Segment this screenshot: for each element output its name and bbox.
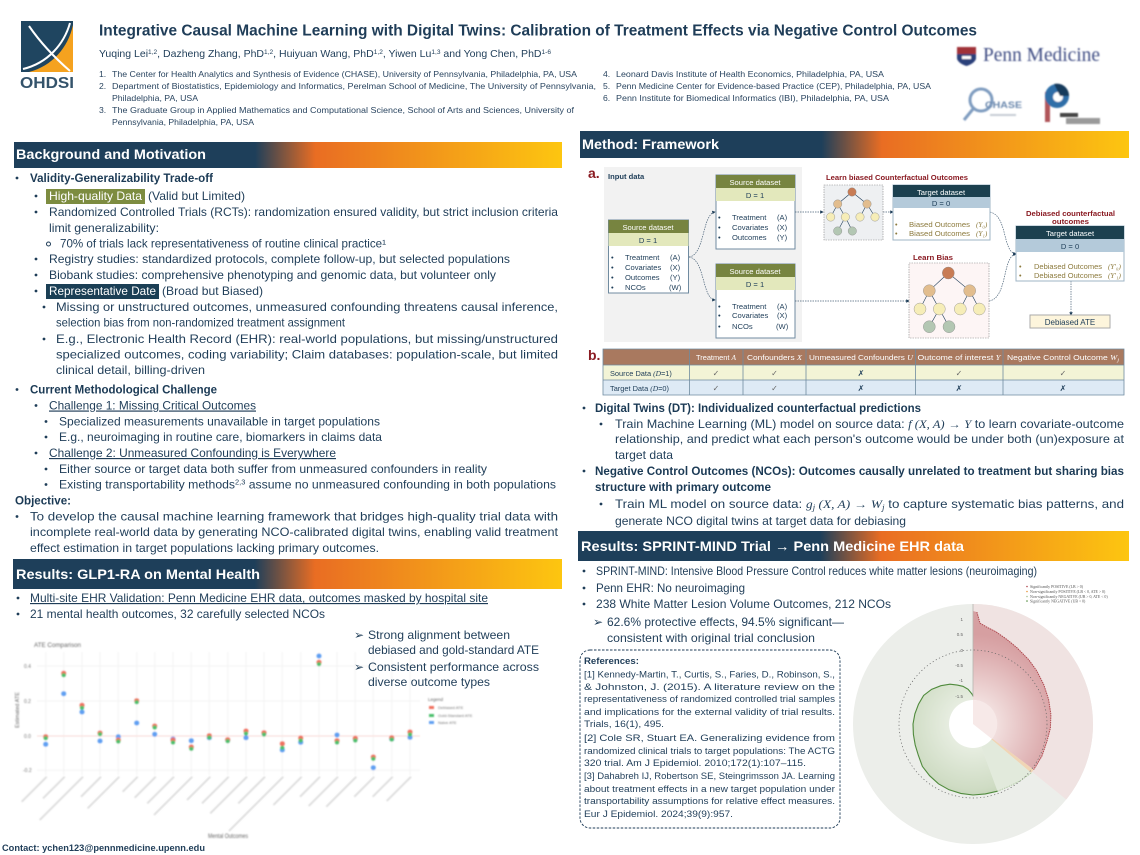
text block: current methodological challenge: Challenge 2: Unmeasured Confounding is Everywhere: [49, 447, 336, 460]
arrows: flow connectors: [689, 212, 1071, 315]
text block: objective: effect estimation in target populations lacking primary outcomes.: [30, 542, 379, 555]
box: source dataset NCOs: Covariates: [732, 311, 768, 320]
legend: [428, 697, 473, 725]
box: source dataset full: •: [611, 283, 614, 292]
box: source dataset outcomes: (Y): [777, 233, 788, 242]
text block: current methodological challenge: Specialized measurements unavailable in target populations: [59, 416, 380, 428]
references: 320 trial. Am J Epidemiol. 2010;172(1):107–115.: [584, 758, 806, 769]
text block: validity-generalizability trade-off: High-quality Data: [49, 190, 143, 203]
references: [2] Cole SR, Stuart EA. Generalizing evidence from: [584, 733, 835, 744]
references: randomized clinical trials to target populations: The ACTG: [584, 746, 835, 757]
callout: GLP1 findings: [354, 628, 539, 689]
box: target dataset debiased: (Y′₀): [1108, 263, 1121, 271]
box: target dataset debiased: [1016, 226, 1124, 281]
heading: method framework: Method: Framework: [582, 136, 719, 152]
table b: data availability: [588, 347, 1124, 395]
table b: data availability: Negative Control Outcome W: [1007, 353, 1116, 362]
logo: CHASE: CHASE: [985, 100, 1022, 110]
authors: , Huiyuan Wang, PhD: [273, 49, 374, 60]
text block: validity-generalizability trade-off: selection bias from non-randomized treatment assignment: [56, 316, 346, 330]
logo: OHDSI: [20, 21, 74, 92]
affiliations left: Pennsylvania, Philadelphia, PA, USA: [112, 117, 254, 127]
text block: negative control outcomes: j: [811, 503, 816, 512]
authors: 1,2: [264, 49, 274, 56]
box: source dataset full: (W): [669, 283, 682, 292]
logo: Penn Medicine: Penn Medicine: [983, 44, 1100, 66]
box: source dataset outcomes: [716, 175, 795, 249]
authors: , Yiwen Lu: [383, 49, 432, 60]
box: source dataset NCOs: •: [718, 302, 721, 311]
authors: , Dazheng Zhang, PhD: [157, 49, 264, 60]
heading: GLP1-RA results: Results: GLP1-RA on Mental Health: [16, 566, 260, 582]
references: [3] Dahabreh IJ, Robertson SE, Steingrimsson JA. Learning: [584, 771, 835, 782]
text block: current methodological challenge: Existing transportability methods: [59, 478, 226, 492]
box: source dataset NCOs: [716, 264, 795, 338]
authors: 1,2: [148, 49, 158, 56]
heading: debiased counterfactual outcomes: outcomes: [1052, 217, 1089, 226]
text block: objective: incomplete real-world data by generating NCO-calibrated digital twins, enabling valid treatment: [30, 526, 559, 539]
heading: debiased counterfactual outcomes: Debiased counterfactual: [1026, 209, 1115, 218]
references: Trials, 16(1), 495.: [584, 719, 664, 730]
text block: negative control outcomes: to capture systematic bias patterns, and: [885, 498, 1124, 511]
text block: current methodological challenge: [16, 384, 556, 492]
text block: negative control outcomes: (X, A): [815, 498, 850, 511]
text block: digital twins: target data: [615, 449, 674, 462]
text block: validity-generalizability trade-off: 70% of trials lack representativeness of routine clinical practice¹: [60, 238, 386, 250]
table b: data availability: Confounders X: [747, 353, 803, 362]
table b: data availability: Unmeasured Confounders U: [809, 353, 914, 362]
box: source dataset NCOs: D = 1: [746, 280, 764, 289]
box: source dataset NCOs: (W): [776, 322, 789, 331]
text block: validity-generalizability trade-off: Registry studies: standardized protocols, complete follow-up, but selected populations: [49, 253, 510, 266]
legend: Non-significantly POSITIVE (LB < 0, ATE > 0): [1030, 590, 1106, 595]
diagram a: framework flow: a.: [588, 165, 600, 181]
affiliations left: 3.: [99, 105, 106, 115]
references: [580, 650, 840, 828]
affiliations left: Department of Biostatistics, Epidemiology and Informatics, Perelman School of Medicine, The University of Pennsylvania,: [112, 81, 596, 91]
heading: GLP1-RA results: [13, 559, 562, 589]
legend: Significantly POSITIVE (LB > 0): [1030, 585, 1084, 589]
table b: data availability: Source Data (D=1): [610, 369, 672, 378]
box: target dataset debiased: •: [1019, 271, 1022, 280]
polar chart: white matter lesion outcomes: 0: [960, 648, 963, 653]
text block: validity-generalizability trade-off: clinical detail, billing-driven: [56, 364, 205, 377]
heading: background and motivation: [14, 142, 562, 168]
title: Integrative Causal Machine Learning with Digital Twins: Calibration of Treatment Effects via Negative Control Outcomes: [99, 22, 977, 40]
text block: validity-generalizability trade-off: specialized outcomes, coding variability; Claim databases: population-scale, but limited: [56, 348, 558, 362]
callout: GLP1 findings: ➢: [354, 628, 364, 642]
heading: SPRINT-MIND results: Results: SPRINT-MIND Trial → Penn Medicine EHR data: [581, 538, 964, 554]
text block: digital twins: relationship, and predict what each person's outcome would be under both (un)exposure at: [615, 433, 1125, 446]
table b: data availability: ✓: [771, 369, 778, 378]
box: source dataset outcomes: •: [718, 223, 721, 232]
box: debiased ATE: [1030, 315, 1110, 328]
table b: data availability: ✓: [1060, 369, 1066, 378]
box: target dataset biased: [893, 185, 990, 240]
box: source dataset full: D = 1: [639, 236, 657, 245]
box: target dataset biased: (Y₀): [976, 221, 988, 229]
heading: SPRINT-MIND results: [578, 531, 1129, 561]
heading: background and motivation: Background and Motivation: [16, 146, 206, 162]
panel: results SPRINT-MIND: [578, 531, 1129, 844]
table b: data availability: j: [1116, 358, 1120, 364]
polar chart: white matter lesion outcomes: 1: [960, 617, 963, 622]
references: & Johnston, J. (2015). A literature review on the: [584, 682, 835, 693]
box: source dataset outcomes: (X): [777, 223, 788, 232]
box: source dataset NCOs: •: [718, 311, 721, 320]
header: [20, 21, 1100, 127]
references: [1] Kennedy-Martin, T., Curtis, S., Faries, D., Robinson, S.,: [584, 670, 835, 680]
text block: negative control outcomes: structure with primary outcome: [595, 481, 772, 494]
heading: learn bias: Learn Bias: [913, 253, 953, 262]
table b: data availability: ✓: [713, 384, 719, 393]
polar chart: white matter lesion outcomes: -1: [959, 678, 963, 683]
box: source dataset outcomes: (A): [777, 213, 788, 222]
input data panel: Input data: [608, 172, 645, 181]
references: about treatment effects in a new target population under: [584, 784, 836, 795]
legend: Non-significantly NEGATIVE (UB > 0, ATE < 0): [1030, 595, 1108, 600]
text block: GLP1 bullets: 21 mental health outcomes, 32 carefully selected NCOs: [30, 608, 325, 621]
affiliations right: Penn Medicine Center for Evidence-based Practice (CEP), Philadelphia, PA, USA: [616, 81, 931, 91]
scatter chart: ATE comparison: -0.2: [23, 768, 32, 774]
text block: SPRINT bullets: Penn EHR: No neuroimaging: [596, 582, 745, 595]
callout: SPRINT findings: [593, 615, 844, 645]
logo: Penn IBI: [1045, 84, 1100, 124]
text block: GLP1 bullets: [17, 592, 488, 621]
box: source dataset full: Outcomes: [625, 273, 660, 282]
panel: method framework: [580, 131, 1129, 528]
polar chart: white matter lesion outcomes: -0.5: [955, 663, 963, 668]
affiliations left: The Graduate Group in Applied Mathematics and Computational Science, School of Arts and Sciences, University of: [112, 105, 575, 115]
box: target dataset biased: Biased Outcomes: [909, 220, 970, 229]
callout: GLP1 findings: Consistent performance across: [368, 661, 539, 674]
authors: 1,2: [374, 49, 383, 56]
text block: validity-generalizability trade-off: (Valid but Limited): [148, 190, 245, 203]
contact: Contact: ychen123@pennmedicine.upenn.edu: [2, 843, 205, 853]
box: debiased ATE: Debiased ATE: [1045, 318, 1095, 327]
box: source dataset full: (A): [670, 253, 681, 262]
text block: GLP1 bullets: Multi-site EHR Validation: Penn Medicine EHR data, outcomes masked by hospital site: [30, 592, 488, 605]
scatter chart: ATE comparison: Estimated ATE: [15, 692, 21, 728]
scatter chart: ATE comparison: 0.2: [24, 699, 31, 705]
affiliations left: [99, 69, 596, 127]
table b: data availability: Treatment A: [696, 353, 737, 362]
affiliations left: 1.: [99, 69, 106, 79]
text block: validity-generalizability trade-off: [16, 172, 559, 377]
text block: validity-generalizability trade-off: Randomized Controlled Trials (RCTs): randomization ensured validity, but strict inclusion criteria: [49, 206, 559, 219]
table b: data availability: b.: [588, 347, 600, 363]
authors: Yuqing Lei: [99, 49, 148, 60]
authors: 1,3: [431, 49, 441, 56]
authors: and Yong Chen, PhD: [440, 49, 541, 60]
text block: negative control outcomes: Negative Control Outcomes (NCOs): Outcomes causally unrelated to treatment but sharing bias: [595, 465, 1124, 478]
legend: Naive ATE: [438, 720, 457, 725]
text block: objective: Objective:: [15, 494, 71, 508]
box: target dataset debiased: •: [1019, 262, 1022, 271]
text block: negative control outcomes: [583, 465, 1124, 528]
text block: validity-generalizability trade-off: Validity-Generalizability Trade-off: [30, 172, 213, 185]
box: target dataset debiased: D = 0: [1061, 242, 1079, 251]
panel: background and motivation: [14, 142, 562, 555]
box: source dataset full: (Y): [670, 273, 681, 282]
heading: method framework: [580, 131, 1129, 158]
box: source dataset full: •: [611, 273, 614, 282]
text block: objective: [15, 494, 559, 555]
box: target dataset biased: Target dataset: [917, 188, 966, 197]
heading: debiased counterfactual outcomes: [1026, 209, 1115, 226]
polar chart: white matter lesion outcomes: [853, 585, 1108, 844]
box: target dataset debiased: Target dataset: [1046, 229, 1095, 238]
callout: SPRINT findings: ➢: [593, 615, 603, 629]
table b: data availability: ✗: [1060, 384, 1066, 393]
affiliations right: Penn Institute for Biomedical Informatics (IBI), Philadelphia, PA, USA: [616, 93, 889, 103]
text block: digital twins: Train Machine Learning (ML) model on source data: f (X, A) → Y to learn covariate-outcome: [615, 418, 1124, 431]
scatter chart: ATE comparison: Mental Outcomes: [208, 834, 248, 840]
box: target dataset biased: •: [895, 229, 898, 238]
text block: SPRINT bullets: SPRINT-MIND: Intensive Blood Pressure Control reduces white matter lesions (neuroimaging): [596, 565, 1037, 578]
callout: SPRINT findings: consistent with original trial conclusion: [607, 632, 815, 645]
callout: SPRINT findings: 62.6% protective effects, 94.5% significant—: [607, 616, 844, 629]
box: source dataset full: Covariates: [625, 263, 661, 272]
text block: current methodological challenge: E.g., neuroimaging in routine care, biomarkers in claims data: [59, 431, 383, 444]
legend: Significantly NEGATIVE (UB < 0): [1030, 600, 1086, 604]
affiliations left: 2.: [99, 81, 106, 91]
box: source dataset outcomes: Source dataset: [729, 178, 781, 187]
box: target dataset debiased: (Y′₁): [1108, 272, 1121, 280]
legend: Legend: [428, 697, 444, 702]
scatter chart: ATE comparison: 0.0: [24, 734, 31, 740]
box: source dataset NCOs: NCOs: [732, 322, 753, 331]
box: source dataset NCOs: Treatment: [732, 302, 767, 311]
table b: data availability: ✗: [858, 369, 864, 378]
box: source dataset NCOs: •: [718, 322, 721, 331]
box: source dataset full: NCOs: [625, 283, 646, 292]
diagram a: framework flow: [588, 165, 1124, 342]
table b: data availability: Outcome of interest Y: [918, 353, 1002, 362]
tree icon: bias model: [909, 263, 989, 338]
callout: GLP1 findings: Strong alignment between: [368, 629, 510, 642]
text block: current methodological challenge: Either source or target data both suffer from unmeasured confounders in reality: [59, 463, 487, 476]
box: source dataset full: [608, 220, 688, 293]
box: source dataset outcomes: Outcomes: [732, 233, 767, 242]
affiliations right: Leonard Davis Institute of Health Economics, Philadelphia, PA, USA: [616, 69, 884, 79]
text block: validity-generalizability trade-off: Representative Date: [49, 285, 156, 298]
legend: Debiased ATE: [438, 705, 464, 710]
text block: validity-generalizability trade-off: limit generalizability:: [49, 222, 159, 235]
text block: validity-generalizability trade-off: E.g., Electronic Health Record (EHR): real-world populations, but missing/unstructured: [56, 333, 558, 346]
box: source dataset outcomes: Treatment: [732, 213, 767, 222]
affiliations right: 4.: [603, 69, 610, 79]
box: target dataset debiased: Debiased Outcomes: [1034, 262, 1102, 271]
affiliations left: The Center for Health Analytics and Synthesis of Evidence (CHASE), University of Pennsylvania, Philadelphia, PA, USA: [112, 69, 577, 79]
text block: objective: To develop the causal machine learning framework that bridges high-quality trial data with: [30, 510, 558, 524]
text block: current methodological challenge: Current Methodological Challenge: [30, 384, 218, 396]
callout: GLP1 findings: diverse outcome types: [368, 676, 490, 689]
heading: learn biased counterfactual outcomes: Learn biased Counterfactual Outcomes: [826, 173, 968, 182]
table b: data availability: ✓: [771, 384, 778, 393]
callout: GLP1 findings: debiased and gold-standard ATE: [368, 644, 539, 657]
text block: negative control outcomes: j: [881, 503, 885, 512]
references: and implications for the external validity of trial results.: [584, 707, 835, 718]
text block: SPRINT bullets: 238 White Matter Lesion Volume Outcomes, 212 NCOs: [596, 598, 891, 611]
references: Eur J Epidemiol. 2024;39(9):957.: [584, 809, 733, 820]
references: References:: [584, 656, 639, 667]
text block: validity-generalizability trade-off: Biobank studies: comprehensive phenotyping and genomic data, but volunteer only: [49, 269, 496, 282]
text block: current methodological challenge: assume no unmeasured confounding in both populations: [245, 478, 556, 492]
table b: data availability: ✓: [956, 369, 962, 378]
text block: current methodological challenge: Challenge 1: Missing Critical Outcomes: [49, 400, 256, 412]
input data panel: [604, 167, 802, 342]
affiliations left: Philadelphia, PA, USA: [112, 93, 198, 103]
text block: digital twins: Digital Twins (DT): Individualized counterfactual predictions: [595, 402, 921, 415]
polar chart: white matter lesion outcomes: 0.5: [957, 632, 963, 637]
box: source dataset full: •: [611, 253, 614, 262]
box: source dataset NCOs: Source dataset: [729, 267, 781, 276]
polar chart: white matter lesion outcomes: -1.5: [955, 694, 963, 699]
table b: data availability: ✗: [956, 384, 962, 393]
affiliations right: [603, 69, 931, 103]
box: source dataset outcomes: •: [718, 213, 721, 222]
box: source dataset full: (X): [670, 263, 681, 272]
text block: negative control outcomes: generate NCO digital twins at target data for debiasing: [615, 515, 906, 528]
text block: negative control outcomes: Train ML model on source data: g: [615, 498, 812, 511]
box: target dataset biased: (Y₁): [976, 230, 988, 238]
box: source dataset outcomes: D = 1: [746, 191, 764, 200]
logo: OHDSI: OHDSI: [20, 75, 74, 92]
text block: validity-generalizability trade-off: Missing or unstructured outcomes, unmeasured confounding threatens causal inference,: [56, 301, 558, 314]
tree icon: biased outcomes model: [824, 185, 883, 240]
affiliations right: 5.: [603, 81, 610, 91]
box: source dataset outcomes: Covariates: [732, 223, 768, 232]
box: source dataset full: Treatment: [625, 253, 660, 262]
box: source dataset NCOs: (X): [777, 311, 788, 320]
text block: SPRINT bullets: [583, 565, 1037, 611]
scatter chart: ATE comparison: [15, 643, 473, 840]
references: transportability assumptions for relative effect measures.: [584, 796, 835, 807]
table b: data availability: ✗: [858, 384, 864, 393]
table b: data availability: ✓: [713, 369, 719, 378]
logo: CHASE: [964, 89, 1022, 120]
authors: 1-6: [541, 49, 551, 56]
panel: results GLP1-RA: [13, 559, 562, 840]
box: source dataset outcomes: •: [718, 233, 721, 242]
table b: data availability: Target Data (D=0): [610, 384, 669, 393]
legend: [1026, 585, 1108, 604]
text block: digital twins: [583, 402, 1125, 462]
scatter chart: ATE comparison: ATE Comparison: [34, 643, 81, 649]
text block: current methodological challenge: 2,3: [235, 480, 245, 486]
callout: GLP1 findings: ➢: [354, 660, 364, 674]
box: source dataset NCOs: (A): [777, 302, 788, 311]
box: target dataset biased: Biased Outcomes: [909, 229, 970, 238]
box: source dataset full: Source dataset: [622, 223, 674, 232]
box: target dataset debiased: Debiased Outcomes: [1034, 271, 1102, 280]
scatter chart: ATE comparison: 0.4: [24, 664, 31, 670]
text block: validity-generalizability trade-off: (Broad but Biased): [162, 285, 263, 298]
affiliations right: 6.: [603, 93, 610, 103]
legend: Gold-Standard ATE: [438, 713, 473, 718]
box: target dataset biased: •: [895, 220, 898, 229]
text block: negative control outcomes: → W: [853, 498, 881, 511]
box: source dataset full: •: [611, 263, 614, 272]
references: representativeness of randomized controlled trial samples: [584, 694, 835, 705]
box: target dataset biased: D = 0: [932, 199, 950, 208]
